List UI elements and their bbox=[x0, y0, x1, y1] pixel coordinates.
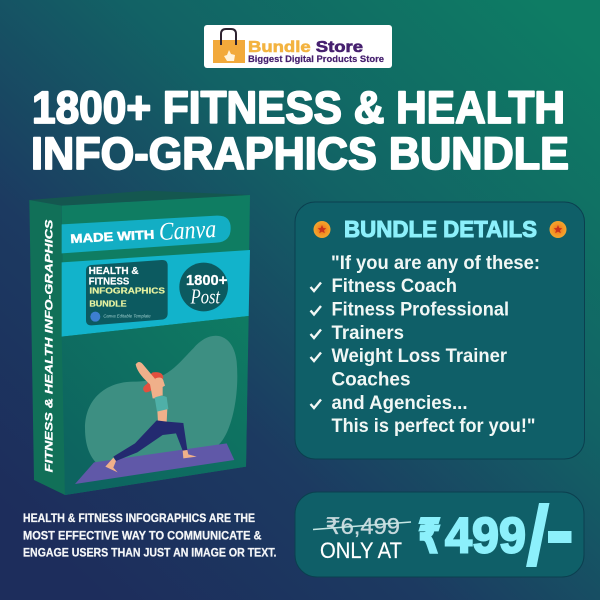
logo badge bbox=[204, 25, 392, 68]
strikethrough bbox=[313, 522, 411, 530]
bundle label panel: Canva Editable Template bbox=[103, 314, 151, 320]
1800+ post badge: 1800+ bbox=[186, 273, 227, 289]
decorative blob bbox=[85, 336, 237, 468]
spine title: FITNESS & HEALTH INFO-GRAPHICS bbox=[43, 220, 55, 472]
yoga mat bbox=[75, 443, 234, 484]
1800+ post badge bbox=[179, 263, 228, 311]
hair bbox=[143, 372, 163, 392]
new price bbox=[418, 503, 572, 567]
only at label: ONLY AT bbox=[320, 538, 402, 563]
front foot bbox=[183, 450, 197, 458]
box spine bbox=[29, 200, 65, 495]
audience list: and Agencies... bbox=[332, 393, 468, 414]
bundle label panel: FITNESS bbox=[89, 277, 130, 288]
bundle label panel: BUNDLE bbox=[89, 300, 127, 309]
box top face bbox=[29, 191, 250, 206]
icon: canva mark bbox=[90, 312, 100, 322]
audience list: "If you are any of these: bbox=[331, 253, 540, 274]
panel heading: BUNDLE DETAILS bbox=[344, 216, 537, 242]
title: 1800+ FITNESS & HEALTH bbox=[32, 82, 565, 133]
back foot bbox=[105, 458, 118, 472]
made with canva banner: MADE WITH bbox=[70, 228, 155, 246]
audience list: This is perfect for you!" bbox=[332, 416, 536, 437]
product box bbox=[29, 191, 250, 495]
icon: star coin right bbox=[550, 221, 566, 238]
1800+ post badge: Post bbox=[190, 287, 221, 309]
title: INFO-GRAPHICS BUNDLE bbox=[31, 128, 569, 179]
logo tagline: Biggest Digital Products Store bbox=[248, 54, 384, 65]
title bbox=[31, 82, 569, 179]
lower front panel bbox=[62, 316, 249, 495]
audience list: Trainers bbox=[332, 323, 404, 344]
made with canva banner: Canva bbox=[158, 215, 217, 246]
audience list bbox=[331, 253, 540, 437]
audience list: Fitness Coach bbox=[332, 276, 457, 297]
head bbox=[155, 378, 165, 396]
bundle label panel: INFOGRAPHICS bbox=[89, 286, 166, 295]
audience list: Fitness Professional bbox=[332, 300, 509, 320]
description text: HEALTH & FITNESS INFOGRAPHICS ARE THE bbox=[23, 513, 255, 525]
panel: bundle details bbox=[295, 202, 584, 459]
description text: MOST EFFECTIVE WAY TO COMMUNICATE & bbox=[23, 530, 262, 542]
icon: star coin left bbox=[314, 221, 330, 238]
description text bbox=[23, 513, 276, 560]
figure: yoga pose bbox=[105, 362, 197, 472]
cyan band bbox=[62, 250, 250, 337]
box front bbox=[62, 195, 250, 495]
new price: 499 bbox=[445, 508, 526, 564]
logo name: Bundle Store bbox=[248, 39, 363, 56]
crop top bbox=[155, 396, 168, 412]
old price: ₹6,499 bbox=[326, 513, 400, 539]
icon: check marks bbox=[310, 282, 321, 408]
panel: price bbox=[295, 492, 584, 577]
new price: ₹ bbox=[418, 510, 441, 562]
icon: shopping bag bbox=[213, 29, 245, 63]
made with canva banner bbox=[62, 215, 231, 253]
legs bbox=[113, 420, 187, 461]
bundle label panel bbox=[86, 260, 168, 325]
audience list: Weight Loss Trainer bbox=[332, 346, 508, 367]
arms bbox=[136, 362, 161, 398]
midriff bbox=[157, 408, 167, 422]
audience list: Coaches bbox=[332, 370, 410, 390]
description text: ENGAGE USERS THAN JUST AN IMAGE OR TEXT. bbox=[23, 548, 276, 560]
bundle label panel: HEALTH & bbox=[89, 266, 139, 277]
